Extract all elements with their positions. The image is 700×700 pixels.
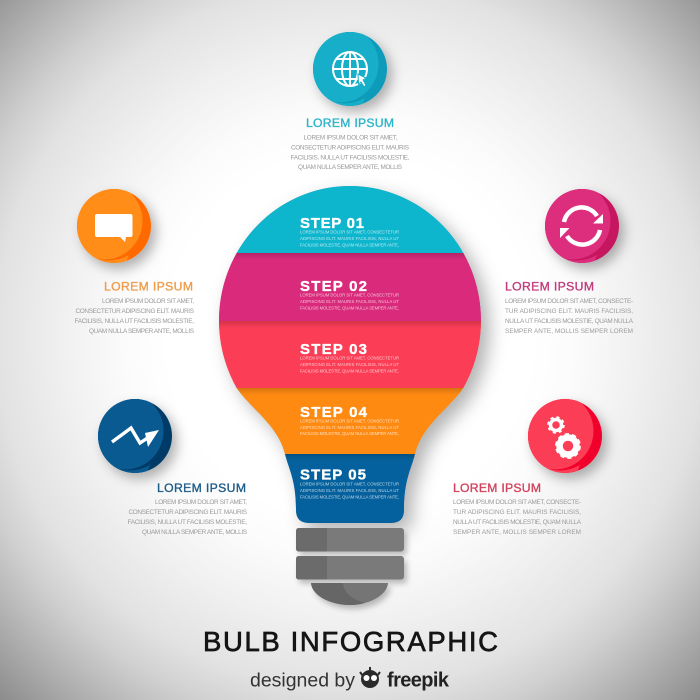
step 03: FACILISIS MOLESTIE, QUAM NULLA SEMPER ANTE,: [300, 368, 399, 374]
bulb shadow: [219, 186, 481, 523]
body text: LOREM IPSUM DOLOR SIT AMET,: [102, 298, 194, 305]
step 04: ADIPISCING ELIT. MAURIS FACILISIS, NULLA UT: [300, 425, 399, 430]
step 03: LOREM IPSUM DOLOR SIT AMET, CONSECTETUR: [300, 356, 399, 361]
bulb infographic: [210, 180, 490, 610]
credit line: [250, 667, 450, 692]
body text: QUAM NULLA SEMPER ANTE, MOLLIS: [298, 164, 402, 171]
body text: SEMPER ANTE, MOLLIS SEMPER LOREM: [505, 328, 633, 335]
body text: [453, 499, 582, 536]
body text: QUAM NULLA SEMPER ANTE, MOLLIS: [142, 529, 247, 536]
callout: bottom left growth arrow: [96, 398, 247, 536]
body text: NULLA UT FACILISIS MOLESTIE, QUAM NULLA: [505, 318, 634, 325]
step 05: STEP 05: [300, 466, 366, 484]
step 04: FACILISIS MOLESTIE, QUAM NULLA SEMPER ANTE,: [300, 431, 399, 436]
body text: LOREM IPSUM DOLOR SIT AMET,: [304, 134, 398, 142]
body text: FACILISIS, NULLA UT FACILISIS MOLESTIE,: [128, 519, 247, 526]
step 01: STEP 01: [300, 215, 364, 232]
icon circle: growth arrow: [86, 392, 172, 477]
step 03: STEP 03: [300, 341, 367, 358]
callout: top globe: [290, 26, 410, 171]
step 01: [300, 215, 399, 248]
heading: LOREM IPSUM: [306, 116, 394, 130]
body text: CONSECTETUR ADIPISCING ELIT. MAURIS: [291, 144, 409, 152]
credit line: designed by: [250, 670, 355, 692]
heading: LOREM IPSUM: [505, 280, 594, 294]
bulb colour bands: [210, 180, 490, 524]
icon circle: gears: [516, 392, 602, 477]
credit line: freepik: [387, 670, 450, 692]
step 02: [300, 278, 399, 310]
body text: QUAM NULLA SEMPER ANTE, MOLLIS: [89, 328, 194, 335]
step 01: LOREM IPSUM DOLOR SIT AMET, CONSECTETUR: [300, 230, 399, 235]
step 05: LOREM IPSUM DOLOR SIT AMET, CONSECTETUR: [300, 482, 399, 486]
step 02: FACILISIS MOLESTIE, QUAM NULLA SEMPER ANTE,: [300, 306, 399, 310]
body text: TUR ADIPISCING ELIT. MAURIS FACILISIS,: [453, 509, 581, 516]
step 04: LOREM IPSUM DOLOR SIT AMET, CONSECTETUR: [300, 419, 399, 424]
body text: LOREM IPSUM DOLOR SIT AMET, CONSECTE-: [505, 298, 633, 305]
heading: LOREM IPSUM: [453, 481, 541, 495]
body text: NULLA UT FACILISIS MOLESTIE, QUAM NULLA: [453, 519, 582, 526]
body text: SEMPER ANTE, MOLLIS SEMPER LOREM: [453, 529, 581, 536]
step 02: LOREM IPSUM DOLOR SIT AMET, CONSECTETUR: [300, 292, 399, 298]
body text: [74, 298, 194, 335]
step 03: ADIPISCING ELIT. MAURIS FACILISIS, NULLA UT: [300, 362, 399, 367]
body text: CONSECTETUR ADIPISCING ELIT. MAURIS: [128, 509, 247, 516]
body text: CONSECTETUR ADIPISCING ELIT. MAURIS: [76, 308, 194, 315]
icon: freepik mascot: [360, 667, 380, 688]
step 05: ADIPISCING ELIT. MAURIS FACILISIS, NULLA UT: [300, 488, 399, 493]
body text: LOREM IPSUM DOLOR SIT AMET,: [155, 499, 247, 506]
callout: bottom right gears: [453, 392, 602, 536]
body text: TUR ADIPISCING ELIT. MAURIS FACILISIS,: [505, 308, 633, 315]
step 05: [300, 466, 399, 500]
step 04: STEP 04: [300, 404, 368, 421]
step 05: FACILISIS MOLESTIE, QUAM NULLA SEMPER ANTE,: [300, 494, 399, 500]
body text: LOREM IPSUM DOLOR SIT AMET, CONSECTE-: [453, 499, 581, 506]
bulb screw base: [296, 528, 404, 610]
title: BULB INFOGRAPHIC: [203, 626, 498, 657]
callout: right refresh: [505, 182, 634, 335]
body text: FACILISIS, NULLA UT FACILISIS MOLESTIE,: [290, 154, 410, 162]
body text: [128, 499, 247, 536]
step 03: [300, 341, 399, 374]
step 02: STEP 02: [300, 278, 367, 295]
body text: [290, 134, 410, 171]
step 01: ADIPISCING ELIT. MAURIS FACILISIS, NULLA UT: [300, 236, 399, 241]
callout: left chat: [75, 188, 194, 334]
icon circle: globe: [302, 26, 387, 110]
body text: FACILISIS, NULLA UT FACILISIS MOLESTIE,: [74, 318, 194, 325]
heading: LOREM IPSUM: [104, 280, 193, 294]
step 02: ADIPISCING ELIT. MAURIS FACILISIS, NULLA UT: [300, 299, 399, 304]
icon circle: refresh arrows: [534, 182, 619, 267]
body text: [505, 298, 634, 335]
icon circle: chat bubble: [66, 182, 151, 267]
step 01: FACILISIS MOLESTIE, QUAM NULLA SEMPER ANTE,: [300, 243, 399, 248]
step 04: [300, 404, 399, 436]
heading: LOREM IPSUM: [157, 481, 246, 495]
